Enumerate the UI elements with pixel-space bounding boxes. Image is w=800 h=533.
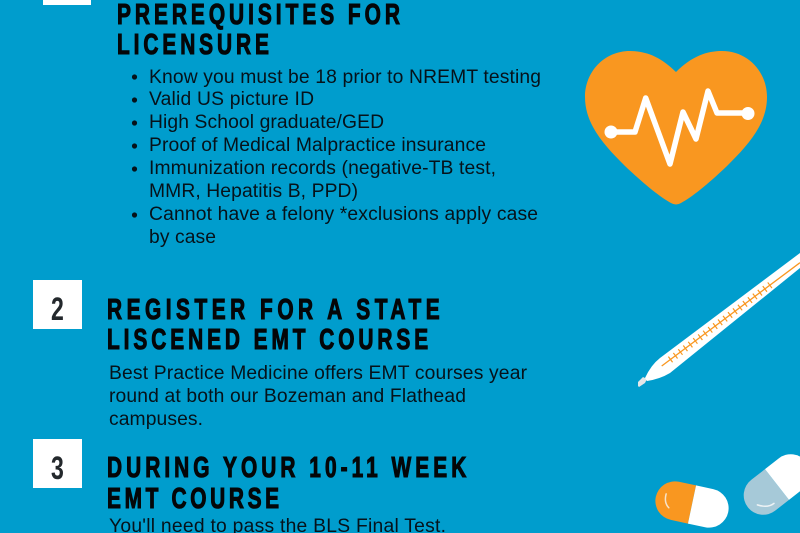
number box: step 1 (cropped): [43, 0, 91, 5]
bullet list: prerequisites: High School graduate/GED: [149, 112, 384, 133]
heading: during your 10-11 week EMT course: DURING YOUR 10-11 WEEK: [107, 452, 466, 484]
text block: course description: campuses.: [109, 409, 203, 430]
icon: orange heart with pulse: [585, 51, 767, 204]
bullet list: prerequisites: by case: [149, 227, 216, 248]
heading: during your 10-11 week EMT course: EMT COURSE: [107, 483, 279, 515]
heading: during your 10-11 week EMT course: [107, 452, 466, 515]
heading: register for a state liscened EMT course: [107, 294, 440, 356]
bullet list: prerequisites: [132, 67, 541, 248]
bullet list: prerequisites: Know you must be 18 prior to NREMT testing: [149, 67, 541, 88]
number box: step 2: [33, 280, 82, 329]
bullet list: prerequisites: Proof of Medical Malpractice insurance: [149, 135, 486, 156]
heading: prerequisites for licensure: LICENSURE: [117, 29, 269, 61]
bullet list: prerequisites: MMR, Hepatitis B, PPD): [149, 181, 358, 202]
number box: step 3: 3: [51, 450, 64, 486]
icon: thermometer: [638, 253, 800, 387]
bullet list: prerequisites: Valid US picture ID: [149, 89, 314, 110]
heading: prerequisites for licensure: [117, 0, 400, 61]
text block: course description: round at both our Bozeman and Flathead: [109, 386, 466, 407]
panel: step 3 during course: [33, 439, 466, 533]
heading: register for a state liscened EMT course: LISCENED EMT COURSE: [107, 324, 428, 356]
text block: course description: [109, 363, 528, 430]
panel: step 2 register: [33, 280, 528, 430]
number box: step 3: [33, 439, 82, 488]
bullet list: prerequisites: Cannot have a felony *exclusions apply case: [149, 204, 538, 225]
icon: orange and white pill: [652, 478, 732, 531]
bullet list: prerequisites: Immunization records (negative-TB test,: [149, 158, 496, 179]
heading: register for a state liscened EMT course: REGISTER FOR A STATE: [107, 294, 440, 326]
text block: course description: Best Practice Medicine offers EMT courses year: [109, 363, 528, 384]
icon: blue and white pill: [736, 446, 800, 523]
panel: step 1 prerequisites: [43, 0, 541, 248]
number box: step 2: 2: [51, 291, 64, 327]
